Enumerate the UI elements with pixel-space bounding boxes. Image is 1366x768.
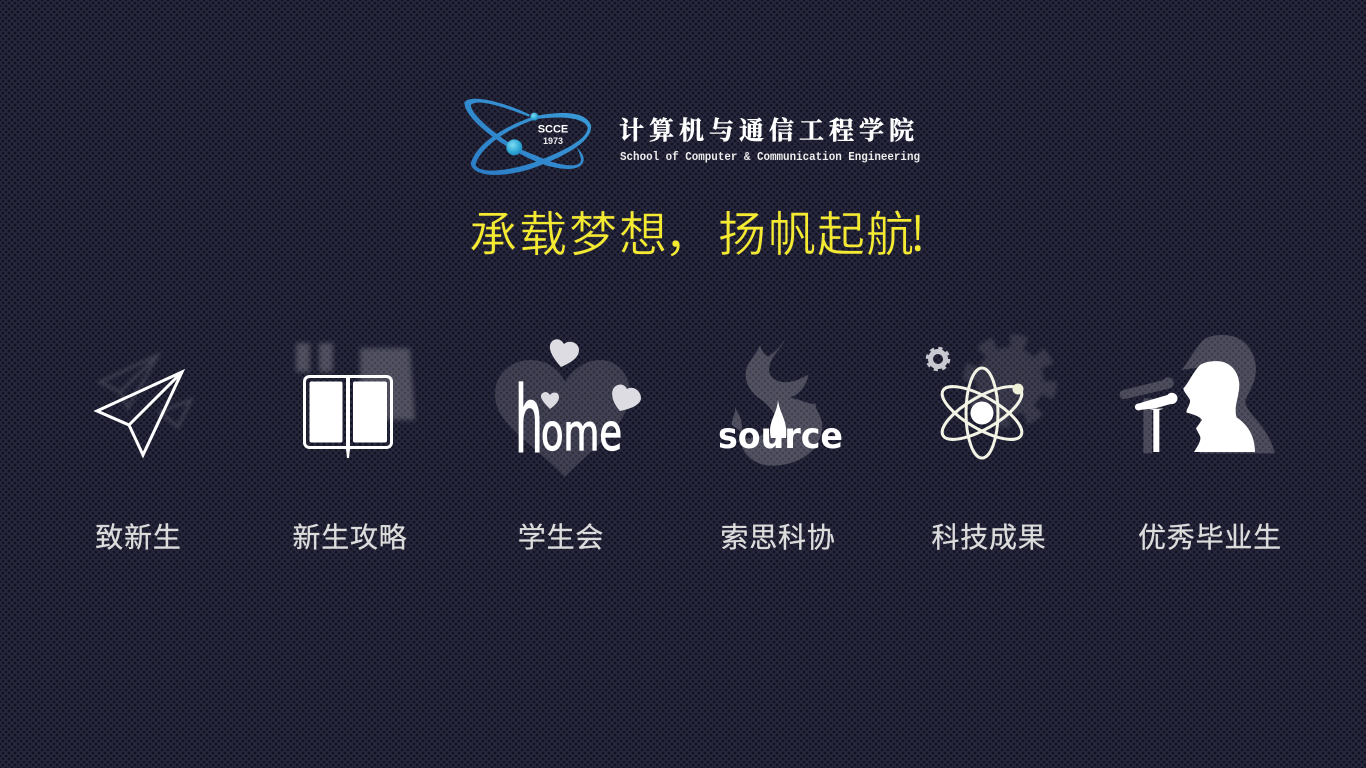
icon: home hearts: [495, 339, 641, 477]
small gear: [928, 348, 948, 370]
wordmark: home: h: [515, 368, 543, 475]
logo: school emblem: [464, 99, 591, 175]
ghost gear: [970, 341, 1050, 421]
icon: open book: [296, 343, 415, 458]
singer silhouette: [1183, 361, 1255, 452]
flame stroke on u: [770, 400, 786, 438]
label: 优秀毕业生: 优秀毕业生: [1138, 522, 1282, 553]
label: 致新生: 致新生: [95, 522, 182, 553]
label: 科技成果: 科技成果: [931, 522, 1047, 553]
atom orbits: [935, 368, 1029, 458]
atom core: [970, 402, 994, 424]
wordmark: home: ome: [541, 404, 622, 462]
ghost singer: [1120, 335, 1275, 453]
label: 学生会: 学生会: [518, 522, 604, 553]
icon: atom and gears: [928, 341, 1050, 458]
label: 新生攻略: 新生攻略: [292, 522, 408, 553]
icon: paper plane: [97, 355, 191, 455]
plane outline: [97, 372, 182, 455]
ghost shapes: [296, 343, 415, 420]
wordmark: source: source: [718, 416, 843, 457]
logo: school emblem: 1973: [543, 136, 563, 146]
wordmark: home: [515, 368, 622, 475]
ghost flame S: [732, 339, 822, 466]
label: 索思科协: 索思科协: [720, 522, 836, 553]
icon: singer with microphone: [1120, 335, 1275, 453]
book cover: [304, 376, 392, 448]
small hearts: [541, 339, 641, 411]
logo: school name Chinese: 计算机与通信工程学院: [619, 111, 919, 147]
ghost heart: [495, 360, 630, 477]
ghost plane: [100, 355, 191, 427]
logo: school emblem: SCCE: [538, 124, 568, 136]
title slogan: 承载梦想，扬帆起航!: [469, 195, 926, 265]
microphone: [1135, 393, 1177, 452]
icon: source flame: [718, 339, 843, 466]
logo: school name English: School of Computer & Communication Engineering: [620, 151, 920, 164]
